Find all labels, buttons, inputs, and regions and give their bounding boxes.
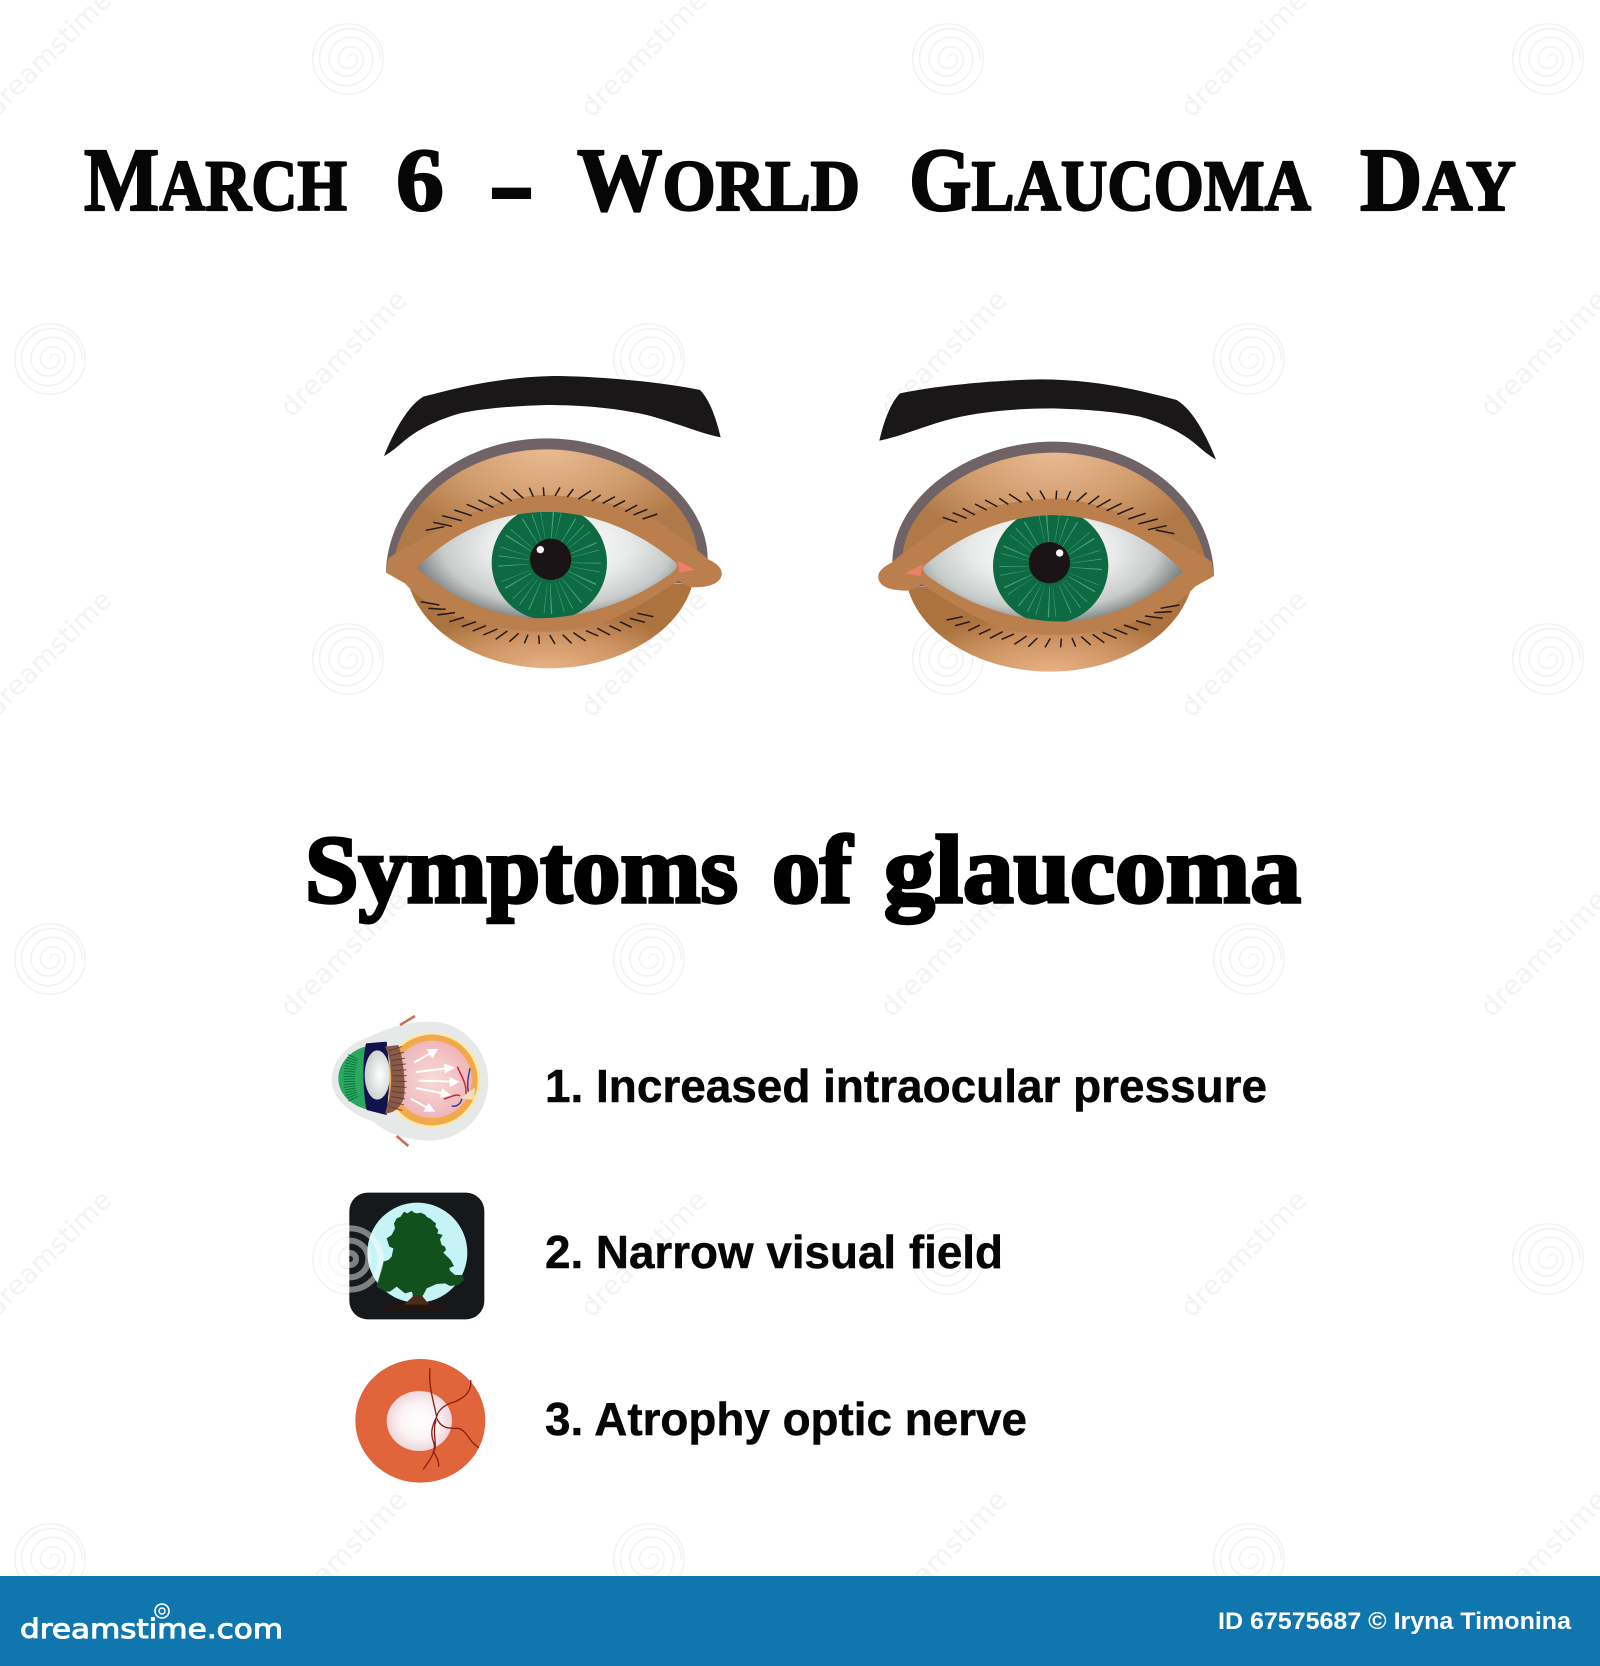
icon: eye cross-section with pressure arrows [332,1016,488,1146]
text: dreamstime [1175,585,1313,723]
title: MARCH [84,131,347,230]
iris dark ring [363,1042,390,1115]
text: dreamstime [275,885,413,1023]
left sclera [417,512,677,618]
list item 2: 2. Narrow visual field [545,1226,1003,1278]
text: dreamstime [875,1485,1013,1623]
dark rounded square [349,1193,484,1319]
left upper eyelid skin [393,449,697,583]
title: – [494,144,529,228]
heading: symptoms of glaucoma: glaucoma [884,816,1301,923]
title [84,131,1516,230]
pale optic disc [387,1391,452,1451]
visual field circle [367,1203,467,1303]
right lashes [943,491,1179,647]
orange fundus [355,1359,485,1483]
optic nerve and vessels [444,1067,475,1106]
heading: symptoms of glaucoma [305,816,1301,923]
right eye illustration [878,379,1216,672]
cornea ribs [349,1057,354,1100]
title: DAY [1360,131,1516,230]
green cornea [338,1047,370,1109]
left pupil highlight [537,546,544,553]
left caruncle [677,561,695,573]
left iris [492,505,607,620]
title: 6 [396,131,444,230]
left lid band [386,495,722,632]
text: dreamstime [1175,1185,1313,1323]
list item 1: 1. Increased intraocular pressure [545,1060,1267,1112]
left lashes [421,487,657,644]
orange choroid layer [386,1035,478,1125]
text: dreamstime [875,885,1013,1023]
list item 3: 3. Atrophy optic nerve [545,1393,1027,1445]
footer logo: dreamstime.com [20,1614,283,1645]
footer logo [20,1604,283,1645]
right iris [993,508,1108,624]
right pupil highlight [1056,549,1063,557]
text: dreamstime [575,1185,713,1323]
outer sclera [332,1022,488,1141]
watermark spiral [319,1228,381,1290]
right upper eyelid skin [903,453,1207,587]
right eye socket rim [892,442,1214,587]
heading: symptoms of glaucoma: of [772,816,853,923]
icon: atrophied optic nerve [355,1359,485,1483]
left eyebrow [384,376,721,456]
left pupil [530,539,571,580]
yellow retina layer [383,1033,480,1127]
text: dreamstime [875,285,1013,423]
heading: symptoms of glaucoma: Symptoms [305,816,738,923]
footer bar [0,1576,1600,1666]
right eyebrow [879,379,1216,459]
pressure arrows [411,1050,457,1111]
lens [365,1050,390,1100]
text: dreamstime [575,585,713,723]
tree canopy [377,1211,464,1295]
left eye illustration [384,376,722,668]
left lower eyelid skin [408,583,693,668]
text: dreamstime [275,285,413,423]
tree trunk [404,1287,429,1305]
title: WORLD [577,131,860,230]
blood vessels [423,1368,479,1469]
ciliary body [385,1045,405,1113]
pink vitreous [393,1041,472,1118]
ciliary ridges [395,1048,400,1110]
right lid band [878,498,1214,635]
text: dreamstime [275,1485,413,1623]
right pupil [1029,542,1070,583]
icon: narrow visual field tree [319,1193,484,1319]
right lower eyelid skin [907,587,1192,672]
extraocular muscle lines [397,1016,415,1146]
title: GLAUCOMA [909,131,1311,230]
right caruncle [905,564,923,576]
footer credit: ID 67575687 © Iryna Timonina [1218,1608,1572,1635]
left eye socket rim [386,438,708,583]
right sclera [923,515,1183,622]
ground shadow [378,1305,448,1309]
